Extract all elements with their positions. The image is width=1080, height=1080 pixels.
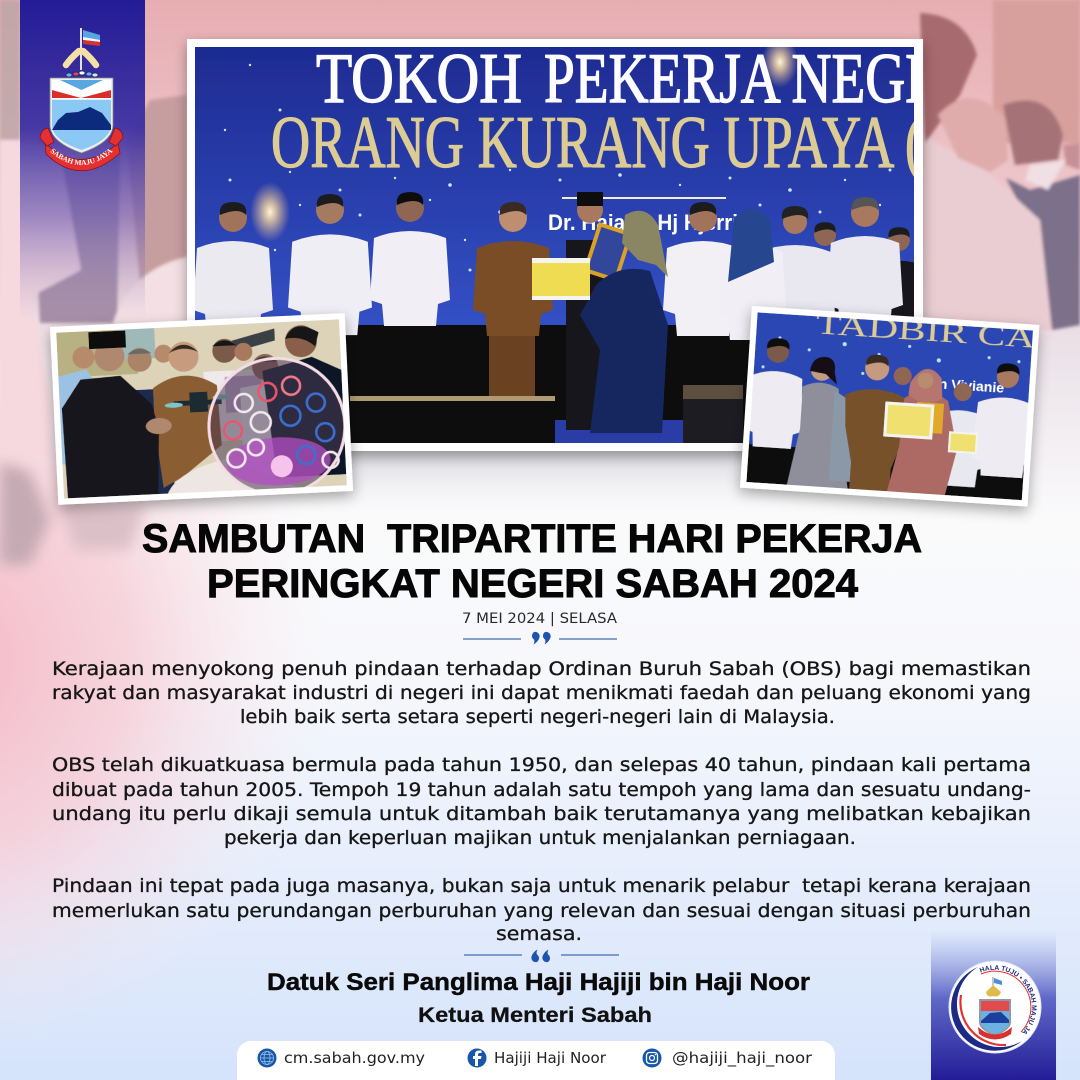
photo: drone exhibit xyxy=(50,313,353,509)
motto ring: HALA TUJU • SABAH MAJU JAYA xyxy=(979,965,1037,1034)
stage backdrop: name text: Dr. Hajarin Hj Hjerri xyxy=(548,210,738,235)
hands xyxy=(145,417,172,435)
faded photo collage: lower left xyxy=(0,462,145,565)
certificate xyxy=(915,402,944,434)
backdrop text: TADBIR CA xyxy=(815,309,1038,355)
text block: paragraph 1: Kerajaan menyokong penuh pindaan terhadap Ordinan Buruh Sabah (OBS) bagi memastikan xyxy=(52,658,1031,680)
text block: paragraph 3: memerlukan satu perundangan perburuhan yang relevan dan sesuai dengan situasi perburuhan xyxy=(52,900,1031,922)
text block: paragraph 2 xyxy=(52,754,1031,849)
icon: ribbon with motto xyxy=(40,128,124,172)
second cheque xyxy=(949,432,977,453)
footer bar xyxy=(237,1041,835,1080)
stage backdrop: white headline xyxy=(316,54,914,104)
backdrop name: uan Vivianie xyxy=(922,374,1005,396)
man in songkok xyxy=(58,329,162,503)
banner: bottom right xyxy=(931,930,1056,1080)
icon: crest beads xyxy=(66,71,98,77)
dignitary in black xyxy=(566,192,604,430)
stage backdrop: white headline: PEKERJA NEGE xyxy=(544,40,939,118)
table xyxy=(166,456,298,494)
logo: Sabah crest xyxy=(40,28,124,172)
photo: main award ceremony xyxy=(187,36,939,451)
brown uniform holding drone xyxy=(151,340,224,488)
icon: clasped arms xyxy=(66,51,96,65)
text block: paragraph 2: OBS telah dikuatkuasa bermula pada tahun 1950, dan selepas 40 tahun, pindaan kali pertama xyxy=(52,754,1031,776)
man in dark jacket xyxy=(260,323,351,478)
recipient in navy xyxy=(580,211,668,433)
text block: paragraph 2: pekerja dan keperluan majikan untuk menjalankan perniagaan. xyxy=(224,827,856,849)
icon: opening quote divider xyxy=(463,632,617,644)
icon: shield xyxy=(50,78,113,153)
mock cheque xyxy=(885,403,933,438)
text block: paragraph 2: undang itu perlu dikaji semula untuk ditambah baik terutamanya yang melibatkan kebajikan xyxy=(52,803,1031,825)
banner: top left xyxy=(20,0,145,320)
crowd xyxy=(58,338,278,494)
website: cm.sabah.gov.my xyxy=(284,1049,425,1067)
icon: globe xyxy=(258,1048,276,1068)
faded photo collage: left xyxy=(0,0,187,457)
speaker role: Ketua Menteri Sabah xyxy=(418,1004,652,1027)
photo: cheque presentation xyxy=(739,305,1043,519)
presenter in brown uniform xyxy=(473,202,553,400)
stage floor xyxy=(346,325,750,442)
woman in pink baju xyxy=(886,368,956,495)
text block: paragraph 1 xyxy=(52,658,1031,728)
lit globe xyxy=(206,355,348,498)
mock cheque xyxy=(532,258,590,300)
backdrop stars xyxy=(761,336,1020,375)
title: SAMBUTAN TRIPARTITE HARI PEKERJA xyxy=(142,517,922,561)
title xyxy=(142,517,922,606)
text block: paragraph 3 xyxy=(52,875,1031,945)
speaker name: Datuk Seri Panglima Haji Hajiji bin Haji Noor xyxy=(267,969,810,996)
icon: blue and red crescent xyxy=(951,967,1031,1051)
text block: paragraph 2: dibuat pada tahun 2005. Tempoh 19 tahun adalah satu tempoh yang lama dan sesuatu undang- xyxy=(52,779,1031,801)
facebook name: Hajiji Haji Noor xyxy=(494,1049,607,1067)
icon: ribbon with motto: SABAH MAJU JAYA xyxy=(50,148,113,166)
icon: closing quote divider xyxy=(464,950,619,962)
certificate frame xyxy=(587,222,628,278)
text block: paragraph 1: lebih baik serta setara seperti negeri-negeri lain di Malaysia. xyxy=(240,706,835,728)
drone xyxy=(164,392,230,412)
lectern xyxy=(350,396,555,443)
speaker xyxy=(683,385,743,443)
icon: facebook xyxy=(468,1048,486,1068)
text block: paragraph 1: rakyat dan masyarakat industri di negeri ini dapat menikmati faedah dan peluang ekonomi yang xyxy=(52,682,1031,704)
brown uniform xyxy=(845,354,905,492)
icon: flag xyxy=(81,28,100,70)
icon: instagram xyxy=(642,1048,662,1068)
icon: miniature crest xyxy=(978,977,1012,1040)
stage backdrop: starbursts xyxy=(250,36,798,242)
faded photo collage: right xyxy=(920,0,1080,330)
faded photo collage: center low xyxy=(350,451,745,511)
text block: paragraph 3: semasa. xyxy=(496,923,582,945)
date: 7 MEI 2024 | SELASA xyxy=(462,611,617,627)
instagram handle: @hajiji_haji_noor xyxy=(672,1049,813,1068)
stage backdrop: white headline: TOKOH xyxy=(316,40,522,118)
title: PERINGKAT NEGERI SABAH 2024 xyxy=(207,562,859,606)
text block: paragraph 3: Pindaan ini tepat pada juga masanya, bukan saja untuk menarik pelabur tetapi kerana kerajaan xyxy=(52,875,1031,897)
people on stage xyxy=(193,192,931,433)
woman in patterned dress xyxy=(786,356,851,489)
woman in blue hijab xyxy=(728,210,774,340)
stage backdrop stars xyxy=(224,64,892,271)
awardees xyxy=(750,338,1028,495)
